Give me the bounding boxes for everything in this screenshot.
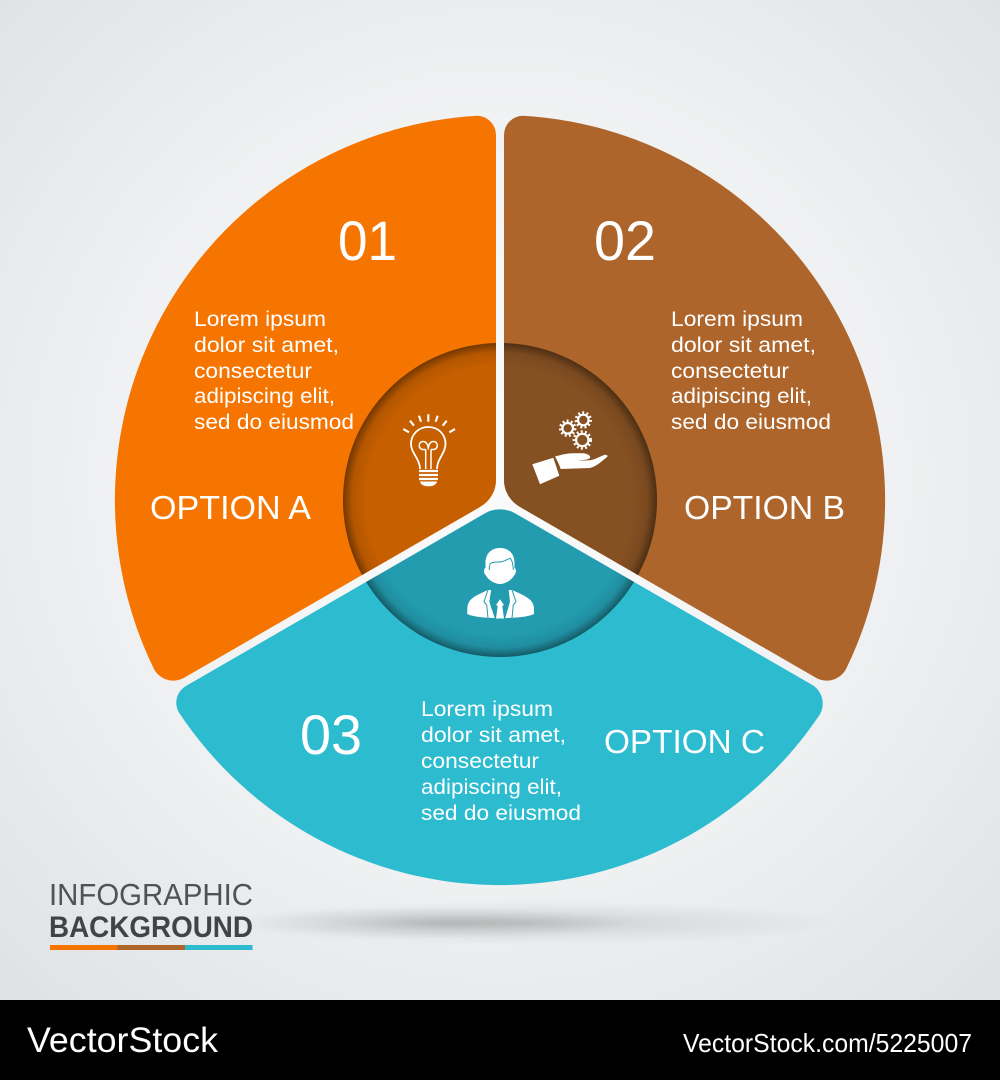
ground shadow xyxy=(220,901,840,945)
text block: option A description: Lorem ipsum xyxy=(194,308,326,331)
icon: light bulb xyxy=(403,414,455,486)
title: infographic background xyxy=(49,878,253,944)
text block: option C description: consectetur xyxy=(421,750,539,773)
text block: option B description: sed do eiusmod xyxy=(671,411,831,434)
text block: option B description: Lorem ipsum xyxy=(671,308,803,331)
text block: option B description: adipiscing elit, xyxy=(671,385,812,408)
text block: option B description: dolor sit amet, xyxy=(671,334,816,357)
title: infographic background: INFOGRAPHIC xyxy=(49,878,253,912)
text block: option A description: dolor sit amet, xyxy=(194,334,339,357)
icon: hand with gears xyxy=(532,413,608,484)
text block: option C description xyxy=(421,698,581,825)
text block: option C description: dolor sit amet, xyxy=(421,724,566,747)
number 02: 02 xyxy=(594,209,656,272)
label: option B: OPTION B xyxy=(684,489,845,526)
icon: businessman xyxy=(467,548,534,619)
footer image id: VectorStock.com/5225007 xyxy=(683,1028,972,1058)
footer logo text: VectorStock xyxy=(27,1021,219,1060)
text block: option C description: Lorem ipsum xyxy=(421,698,553,721)
footer bar xyxy=(0,1000,1000,1080)
legend colour bar xyxy=(50,945,252,950)
number 03: 03 xyxy=(300,703,362,766)
text block: option B description xyxy=(671,308,831,434)
segment: option B brown xyxy=(504,116,886,681)
text block: option A description: adipiscing elit, xyxy=(194,385,335,408)
label: option C: OPTION C xyxy=(604,723,765,760)
title: infographic background: BACKGROUND xyxy=(49,911,253,944)
text block: option B description: consectetur xyxy=(671,360,789,383)
text block: option A description xyxy=(194,308,354,434)
text block: option C description: sed do eiusmod xyxy=(421,802,581,825)
label: option A: OPTION A xyxy=(150,489,311,526)
number 01: 01 xyxy=(338,209,397,272)
text block: option A description: sed do eiusmod xyxy=(194,411,354,434)
segment: option C teal xyxy=(176,509,823,886)
segment: option A orange xyxy=(114,116,496,681)
text block: option C description: adipiscing elit, xyxy=(421,776,562,799)
text block: option A description: consectetur xyxy=(194,360,312,383)
